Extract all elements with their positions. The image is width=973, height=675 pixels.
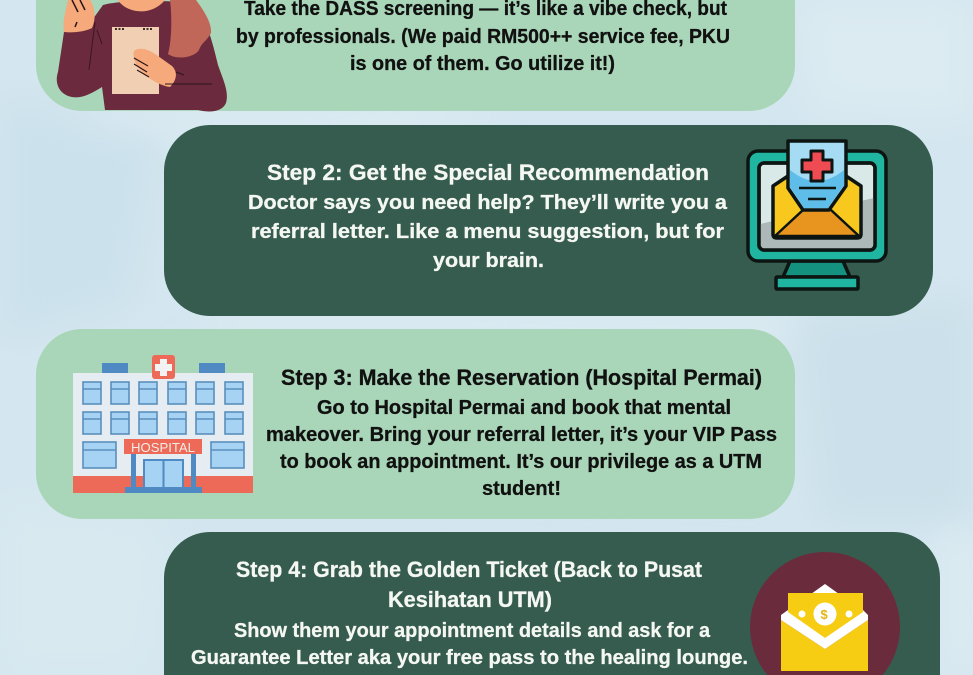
text: step 4 — [191, 557, 748, 669]
text: step 3: student! — [482, 478, 561, 500]
text: step 2: Doctor says you need help? They’ll write you a — [248, 192, 728, 214]
text: step 2: referral letter. Like a menu suggestion, but for — [251, 221, 724, 243]
text: step 1 body: by professionals. (We paid RM500++ service fee, PKU — [236, 26, 730, 48]
text: step 3: Step 3: Make the Reservation (Hospital Permai) — [281, 365, 762, 390]
text: step 2 — [248, 160, 728, 272]
text: step 2: your brain. — [433, 250, 544, 272]
text: step 3: makeover. Bring your referral letter, it’s your VIP Pass — [266, 424, 777, 446]
illustration: woman with notepad — [57, 0, 227, 112]
panel: step 3 — [36, 329, 795, 519]
text: step 2: Step 2: Get the Special Recommendation — [267, 160, 709, 185]
text: step 3: to book an appointment. It’s our privilege as a UTM — [280, 451, 762, 473]
text: step 4: Show them your appointment details and ask for a — [234, 620, 711, 642]
panel: step 2 — [164, 125, 933, 316]
icon: money envelope: $ — [820, 607, 828, 622]
icon: money envelope — [750, 552, 900, 675]
text: step 1 body — [236, 0, 730, 75]
icon: hospital building — [73, 355, 253, 493]
text: step 3 — [266, 365, 777, 500]
icon: monitor with medical letter — [748, 141, 886, 289]
text: step 4: Step 4: Grab the Golden Ticket (Back to Pusat — [236, 557, 703, 582]
text: step 3: Go to Hospital Permai and book that mental — [317, 397, 731, 419]
icon: hospital building: HOSPITAL — [131, 440, 195, 455]
panel: step 4 — [164, 532, 940, 675]
text: step 4: Kesihatan UTM) — [388, 587, 552, 612]
text: step 4: Guarantee Letter aka your free pass to the healing lounge. — [191, 647, 748, 669]
text: step 1 body: is one of them. Go utilize it!) — [350, 53, 615, 75]
panel: step 1 — [36, 0, 795, 112]
